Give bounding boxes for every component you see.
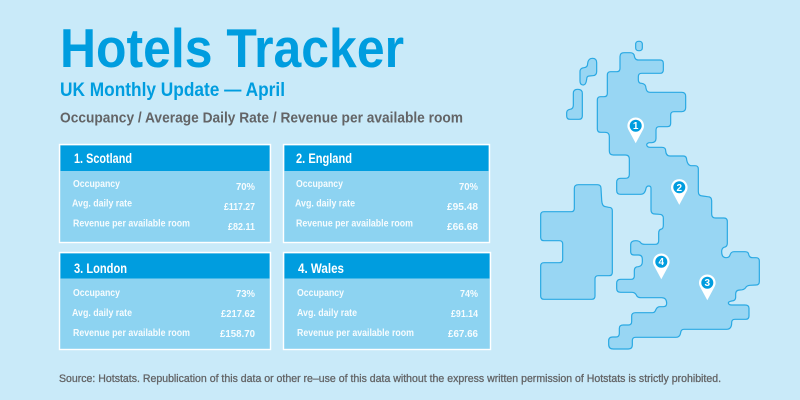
title: Hotels Tracker [60, 17, 404, 79]
panel: England [284, 144, 490, 242]
map: Great Britain [597, 53, 759, 349]
icon: pin 2: 2 [677, 183, 683, 194]
daily rate row: £117.27 [224, 201, 255, 213]
occupancy row [73, 179, 256, 193]
icon: pin 3 [699, 274, 716, 300]
daily rate row: £91.14 [451, 308, 478, 320]
revenue row: Revenue per available room [297, 328, 414, 339]
revenue row: £82.11 [228, 221, 255, 233]
heading: England: 2. England [296, 151, 352, 166]
occupancy row [296, 179, 479, 193]
revenue row: Revenue per available room [296, 218, 413, 230]
map: UK [541, 41, 759, 349]
map: Hebrides north [580, 58, 597, 85]
occupancy row [73, 288, 256, 300]
daily rate row [297, 308, 478, 320]
revenue row [297, 328, 478, 340]
daily rate row [72, 308, 255, 320]
daily rate row: Avg. daily rate [297, 308, 357, 319]
daily rate row: Avg. daily rate [295, 198, 355, 210]
daily rate row [295, 198, 478, 213]
revenue row [73, 218, 255, 233]
daily rate row: Avg. daily rate [72, 308, 132, 319]
heading: Wales: 4. Wales [298, 261, 344, 276]
revenue row: Revenue per available room [73, 218, 190, 230]
panel: London [60, 252, 270, 350]
panel: Scotland [60, 144, 270, 242]
icon: pin 3: 3 [705, 278, 711, 289]
revenue row [73, 328, 255, 340]
daily rate row [72, 198, 255, 213]
revenue row: £158.70 [220, 328, 255, 340]
revenue row [296, 218, 478, 233]
metrics line: Occupancy / Average Daily Rate / Revenue per available room [60, 110, 463, 126]
source note: Source: Hotstats. Republication of this data or other re–use of this data without the express written permission of Hotstats is strictly prohibited. [59, 373, 721, 385]
daily rate row: £217.62 [221, 308, 255, 320]
panel: Wales [284, 252, 490, 350]
revenue row: Revenue per available room [73, 328, 190, 339]
occupancy row: Occupancy [297, 288, 344, 299]
occupancy row: 74% [460, 288, 479, 300]
occupancy row: Occupancy [73, 288, 120, 299]
occupancy row: Occupancy [73, 179, 120, 190]
subtitle: UK Monthly Update — April [60, 79, 285, 101]
icon: pin 4 [653, 253, 670, 279]
map: Shetland [636, 41, 642, 51]
occupancy row: Occupancy [296, 179, 343, 190]
revenue row: £67.66 [448, 328, 478, 340]
map: Northern Ireland [541, 185, 612, 299]
occupancy row: 73% [236, 288, 256, 300]
occupancy row [297, 288, 479, 300]
occupancy row: 70% [459, 181, 479, 193]
heading: Scotland: 1. Scotland [74, 151, 132, 166]
icon: pin 2 [671, 179, 688, 205]
daily rate row: Avg. daily rate [72, 198, 132, 210]
revenue row: £66.68 [447, 221, 478, 233]
heading: London: 3. London [74, 261, 127, 276]
occupancy row: 70% [236, 181, 256, 193]
daily rate row: £95.48 [447, 201, 478, 213]
map: Hebrides south [567, 89, 582, 119]
icon: pin 1: 1 [633, 121, 639, 132]
icon: pin 4: 4 [659, 257, 665, 268]
icon: pin 1 [627, 117, 644, 143]
